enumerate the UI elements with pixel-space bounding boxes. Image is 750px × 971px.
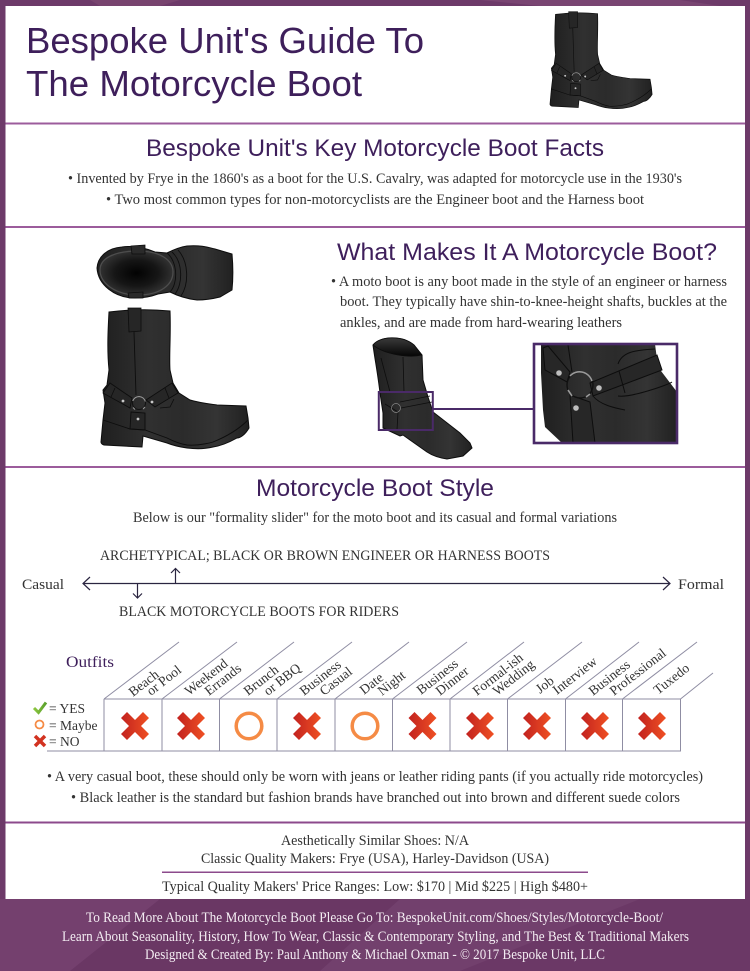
table: outfit column labels: Beach (126, 667, 162, 699)
illustration: three-quarter boot with highlight (373, 338, 534, 459)
table: outfit grid lines (47, 642, 713, 751)
table: outfit column labels: Interview (550, 653, 600, 697)
table: outfit column labels: Brunch (241, 662, 282, 698)
table: outfit column labels: Formal-ish (470, 650, 526, 698)
text: key facts bullets (68, 171, 682, 208)
table: outfit column labels: Night (375, 667, 408, 698)
text: description: • A moto boot is any boot made in the style of an engineer or harness (331, 274, 727, 290)
panel: what makes it a motorcycle boot (331, 239, 727, 331)
table: outfit column labels: Business (297, 657, 344, 698)
panel: key facts (68, 135, 682, 208)
chart: formality slider: BLACK MOTORCYCLE BOOTS FOR RIDERS (119, 604, 399, 620)
text: description: boot. They typically have shin-to-knee-height shafts, buckles at the (340, 294, 727, 310)
text: description: ankles, and are made from hard-wearing leathers (340, 315, 622, 331)
table: outfit column labels: or BBQ (261, 660, 304, 698)
table: outfit column labels: Errands (202, 661, 244, 698)
legend: = YES (49, 701, 85, 716)
table: outfit column labels: Tuxedo (651, 660, 692, 697)
illustration: boot top view (97, 245, 233, 300)
title: The Motorcycle Boot (26, 63, 362, 104)
footer: Designed & Created By: Paul Anthony & Michael Oxman - © 2017 Bespoke Unit, LLC (145, 947, 605, 963)
heading: outfits: Outfits (66, 654, 114, 671)
heading: what makes it: What Makes It A Motorcycle Boot? (337, 239, 717, 266)
table: outfit column labels: or Pool (144, 662, 184, 698)
chart: formality slider: Casual (22, 577, 64, 593)
legend: = Maybe (49, 718, 97, 733)
table: outfit column labels: Professional (607, 645, 669, 698)
panel: makers white area (6, 824, 745, 899)
chart: formality slider: Formal (678, 577, 724, 593)
heading: key facts: Bespoke Unit's Key Motorcycle Boot Facts (146, 135, 604, 162)
table: outfit column labels: Business (414, 656, 461, 697)
table: outfit column labels: Business (586, 657, 633, 698)
footer (62, 910, 689, 963)
legend: = NO (49, 734, 80, 749)
heading: motorcycle boot style: Motorcycle Boot Style (256, 475, 494, 502)
text: key facts bullets: • Two most common types for non-motorcyclists are the Engineer boot and the Harness boot (106, 192, 645, 208)
chart: formality slider (22, 548, 724, 620)
table: outfit column labels: Wedding (490, 656, 537, 698)
text: similar shoes and makers (201, 833, 549, 867)
table: outfit column labels: Job (533, 673, 557, 696)
text: style notes: • A very casual boot, these should only be worn with jeans or leather riding pants (if you actually ride motorcycles) (47, 769, 703, 785)
text: similar shoes and makers: Aesthetically Similar Shoes: N/A (281, 833, 470, 849)
chart: formality slider: ARCHETYPICAL; BLACK OR BROWN ENGINEER OR HARNESS BOOTS (100, 548, 550, 564)
text: key facts bullets: • Invented by Frye in the 1860's as a boot for the U.S. Cavalry, was adapted for motorcycle use in the 1930's (68, 171, 682, 187)
table: ratings (121, 712, 666, 740)
footer: Learn About Seasonality, History, How To Wear, Classic & Contemporary Styling, and The Best & Traditional Makers (62, 929, 689, 945)
text: price ranges: Typical Quality Makers' Price Ranges: Low: $170 | Mid $225 | High $480+ (162, 879, 588, 895)
title: Bespoke Unit's Guide To (26, 20, 424, 61)
table: outfit column labels: Weekend (182, 655, 231, 698)
illustration: zoomed harness detail (534, 344, 677, 443)
legend (34, 701, 97, 749)
table: outfit column labels: Casual (317, 664, 355, 698)
icon: side view boot (550, 12, 652, 109)
footer: To Read More About The Motorcycle Boot Please Go To: BespokeUnit.com/Shoes/Styles/Motorcycle-Boot/ (86, 910, 664, 926)
table: outfit column labels (126, 645, 692, 699)
text: similar shoes and makers: Classic Quality Makers: Frye (USA), Harley-Davidson (USA) (201, 851, 549, 867)
text: style notes (47, 769, 703, 806)
text: description (331, 274, 727, 331)
text: slider intro: Below is our "formality slider" for the moto boot and its casual and formal variations (133, 510, 617, 526)
title (26, 20, 424, 104)
illustration: boot side view large (101, 308, 249, 449)
text: style notes: • Black leather is the standard but fashion brands have branched out into brown and different suede colors (71, 790, 680, 806)
table: outfit column labels: Date (357, 670, 386, 697)
table: outfit column labels: Dinner (433, 663, 472, 698)
